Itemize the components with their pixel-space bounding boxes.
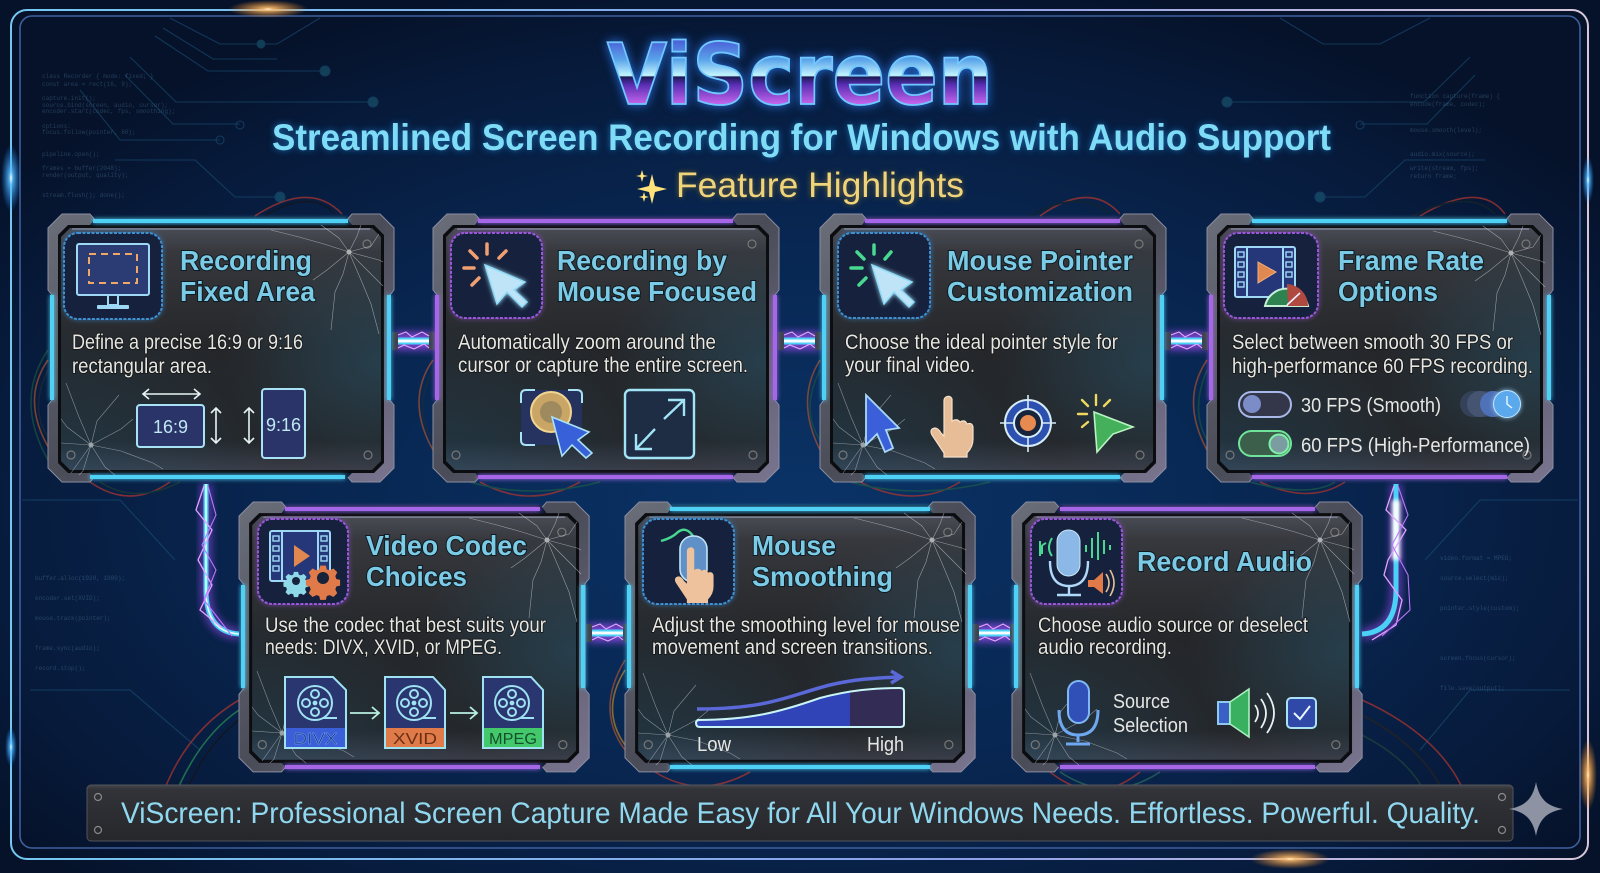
description: Choose audio source or deselect: [1038, 614, 1308, 637]
card title: Smoothing: [752, 561, 893, 592]
card title: [947, 245, 1133, 307]
code text background: frames = buffer(2048);: [42, 165, 121, 172]
icon: 16:9 aspect box: [137, 389, 221, 447]
card title: Choices: [366, 561, 467, 592]
icon: source microphone: [1059, 681, 1098, 744]
code text background: class Recorder { mode: fixed; }: [42, 73, 154, 80]
card title: Mouse Pointer: [947, 245, 1133, 276]
description: [265, 614, 546, 659]
code text background: encoder.set(XVID);: [35, 595, 100, 602]
icon: mpeg file: [483, 677, 543, 748]
code text background: file.save(output);: [1440, 685, 1505, 692]
card title: [557, 245, 757, 307]
icon: monitor: [64, 233, 162, 319]
card title: Customization: [947, 276, 1133, 307]
toggle: 60 fps: 60 FPS (High-Performance): [1301, 435, 1530, 457]
code text background: mouse.smooth(level);: [1410, 127, 1482, 134]
card title: Record Audio: [1137, 546, 1312, 577]
subtitle: Streamlined Screen Recording for Windows with Audio Support: [272, 117, 1331, 158]
description: [845, 331, 1118, 377]
panel: recording fixed area: [48, 214, 394, 482]
source selection label: [1113, 691, 1188, 737]
icon: hand on mouse: [643, 519, 734, 604]
panel: mouse smoothing: [625, 502, 975, 772]
icon: xvid file: [385, 677, 445, 748]
cracks: [1433, 226, 1545, 335]
code text background: frame.sync(audio);: [35, 645, 100, 652]
description: Select between smooth 30 FPS or: [1232, 331, 1513, 354]
description: [1038, 614, 1308, 659]
toggle: 60 fps: [1239, 431, 1530, 457]
section heading: feature highlights: Feature Highlights: [676, 166, 964, 205]
right vertical electric connector: [1362, 484, 1410, 640]
description: [652, 614, 960, 659]
description: [458, 331, 748, 377]
description: audio recording.: [1038, 636, 1172, 659]
chart: smoothing slider: High: [867, 734, 904, 756]
icon: green arrow with yellow rays: [1078, 395, 1133, 452]
cables behind cards: [31, 197, 1505, 808]
card title: Fixed Area: [180, 276, 315, 307]
source selection label: Selection: [1113, 715, 1188, 737]
code text background: [35, 73, 1519, 692]
description: rectangular area.: [72, 355, 212, 378]
source selection label: Source: [1113, 691, 1170, 713]
toggle: 30 fps: 30 FPS (Smooth): [1301, 395, 1441, 417]
icon: corner sparkle: [1509, 782, 1563, 836]
card title: Recording: [180, 245, 312, 276]
horizontal electric connectors: [392, 332, 1208, 642]
code text background: capture.init();: [42, 95, 96, 102]
code text background: const area = rect(16, 9);: [42, 81, 132, 88]
icon: cursor with orange rays: [451, 233, 542, 318]
card title: [752, 530, 893, 592]
panel: frame rate options: [1207, 214, 1553, 482]
arrow: [350, 707, 379, 719]
cracks: [252, 513, 581, 763]
code text background: pointer.style(custom);: [1440, 605, 1519, 612]
accent bars: [437, 221, 775, 477]
chart: smoothing slider: Low: [697, 734, 732, 756]
card title: [1338, 245, 1484, 307]
icon: xvid file: XVID: [393, 731, 437, 748]
accent bars: [243, 509, 583, 767]
code text background: source.bind(screen, audio, cursor);: [42, 102, 168, 109]
code text background: encode(frame, codec);: [1410, 101, 1486, 108]
icon: mpeg file: MPEG: [489, 731, 537, 748]
cracks: [833, 383, 935, 475]
icon: 16:9 aspect box: 16:9: [153, 417, 188, 437]
card title: Frame Rate: [1338, 245, 1484, 276]
code text background: audio.mix(source);: [1410, 151, 1475, 158]
description: cursor or capture the entire screen.: [458, 354, 748, 377]
card title: Recording by: [557, 245, 727, 276]
code text background: source.select(mic);: [1440, 575, 1508, 582]
description: [72, 331, 303, 378]
icon: divx file: [285, 677, 346, 748]
panel: mouse pointer customization: [820, 214, 1166, 482]
description: Choose the ideal pointer style for: [845, 331, 1118, 354]
description: high-performance 60 FPS recording.: [1232, 355, 1533, 378]
code text background: pipeline.open();: [42, 151, 100, 158]
code text background: options:: [42, 123, 71, 130]
icon: motion toggle: [1460, 390, 1520, 418]
code text background: write(stream, fps);: [1410, 165, 1478, 172]
icon: cursor with green rays: [838, 233, 930, 318]
code text background: stream.flush(); done();: [42, 192, 125, 199]
description: needs: DIVX, XVID, or MPEG.: [265, 636, 502, 659]
code text background: record.stop();: [35, 665, 85, 672]
card title: Mouse Focused: [557, 276, 757, 307]
code text background: function capture(frame) {: [1410, 93, 1500, 100]
icon: blue arrow pointer: [866, 395, 899, 452]
panel: record audio: [1012, 502, 1362, 772]
card title: [366, 530, 527, 592]
icon: film with gears: [258, 519, 348, 604]
description: Automatically zoom around the: [458, 331, 716, 354]
code text background: mouse.track(pointer);: [35, 615, 111, 622]
description: Use the codec that best suits your: [265, 614, 546, 637]
code text background: return frame;: [1410, 173, 1457, 180]
panel: video codec choices: [239, 502, 589, 772]
card title: Options: [1338, 276, 1438, 307]
accent bars: [629, 509, 970, 767]
arrow: [450, 707, 477, 719]
icon: focus zoom cursor: [521, 390, 592, 458]
code text background: render(output, quality);: [42, 172, 128, 179]
icon: 9:16 aspect box: 9:16: [266, 415, 301, 435]
cracks: [638, 513, 966, 765]
icon: green speaker: [1218, 689, 1274, 737]
description: Adjust the smoothing level for mouse: [652, 614, 960, 637]
cracks: [1025, 513, 1354, 765]
icon: microphone with waves: [1031, 519, 1122, 604]
icon: divx file: DIVX: [294, 731, 338, 748]
cracks: [61, 225, 383, 475]
description: movement and screen transitions.: [652, 636, 933, 659]
code text background: focus.follow(pointer, 60);: [42, 129, 136, 136]
footer tagline: ViScreen: Professional Screen Capture Made Easy for All Your Windows Needs. Effortless. Powerful. Quality.: [121, 797, 1480, 830]
footer banner: [87, 785, 1513, 841]
accent bars: [1211, 221, 1549, 477]
icon: film with speedometer: [1224, 233, 1318, 318]
title: ViScreen: [607, 26, 993, 125]
card title: [180, 245, 315, 307]
code text background: buffer.alloc(1920, 1080);: [35, 575, 125, 582]
icon: 9:16 aspect box: [244, 389, 305, 458]
code text background: encoder.start(codec, fps, smoothing);: [42, 108, 175, 115]
description: your final video.: [845, 354, 975, 377]
panel: recording by mouse focused: [433, 214, 779, 482]
toggle: 30 fps: [1239, 392, 1441, 417]
chart: smoothing slider: [695, 671, 904, 756]
card title: Video Codec: [366, 530, 527, 561]
code text background: video.format = MPEG;: [1440, 555, 1512, 562]
card title: Mouse: [752, 530, 836, 561]
icon: hand pointer: [931, 396, 973, 457]
accent bars: [1016, 509, 1357, 767]
icon: checkbox: [1287, 698, 1316, 728]
accent bars: [824, 221, 1162, 477]
icon: target: [1000, 395, 1056, 452]
accent bars: [52, 221, 389, 477]
code text background: screen.focus(cursor);: [1440, 655, 1516, 662]
description: [1232, 331, 1533, 378]
description: Define a precise 16:9 or 9:16: [72, 331, 303, 354]
left vertical electric connector: [196, 484, 239, 636]
icon: full screen expand: [625, 390, 694, 458]
